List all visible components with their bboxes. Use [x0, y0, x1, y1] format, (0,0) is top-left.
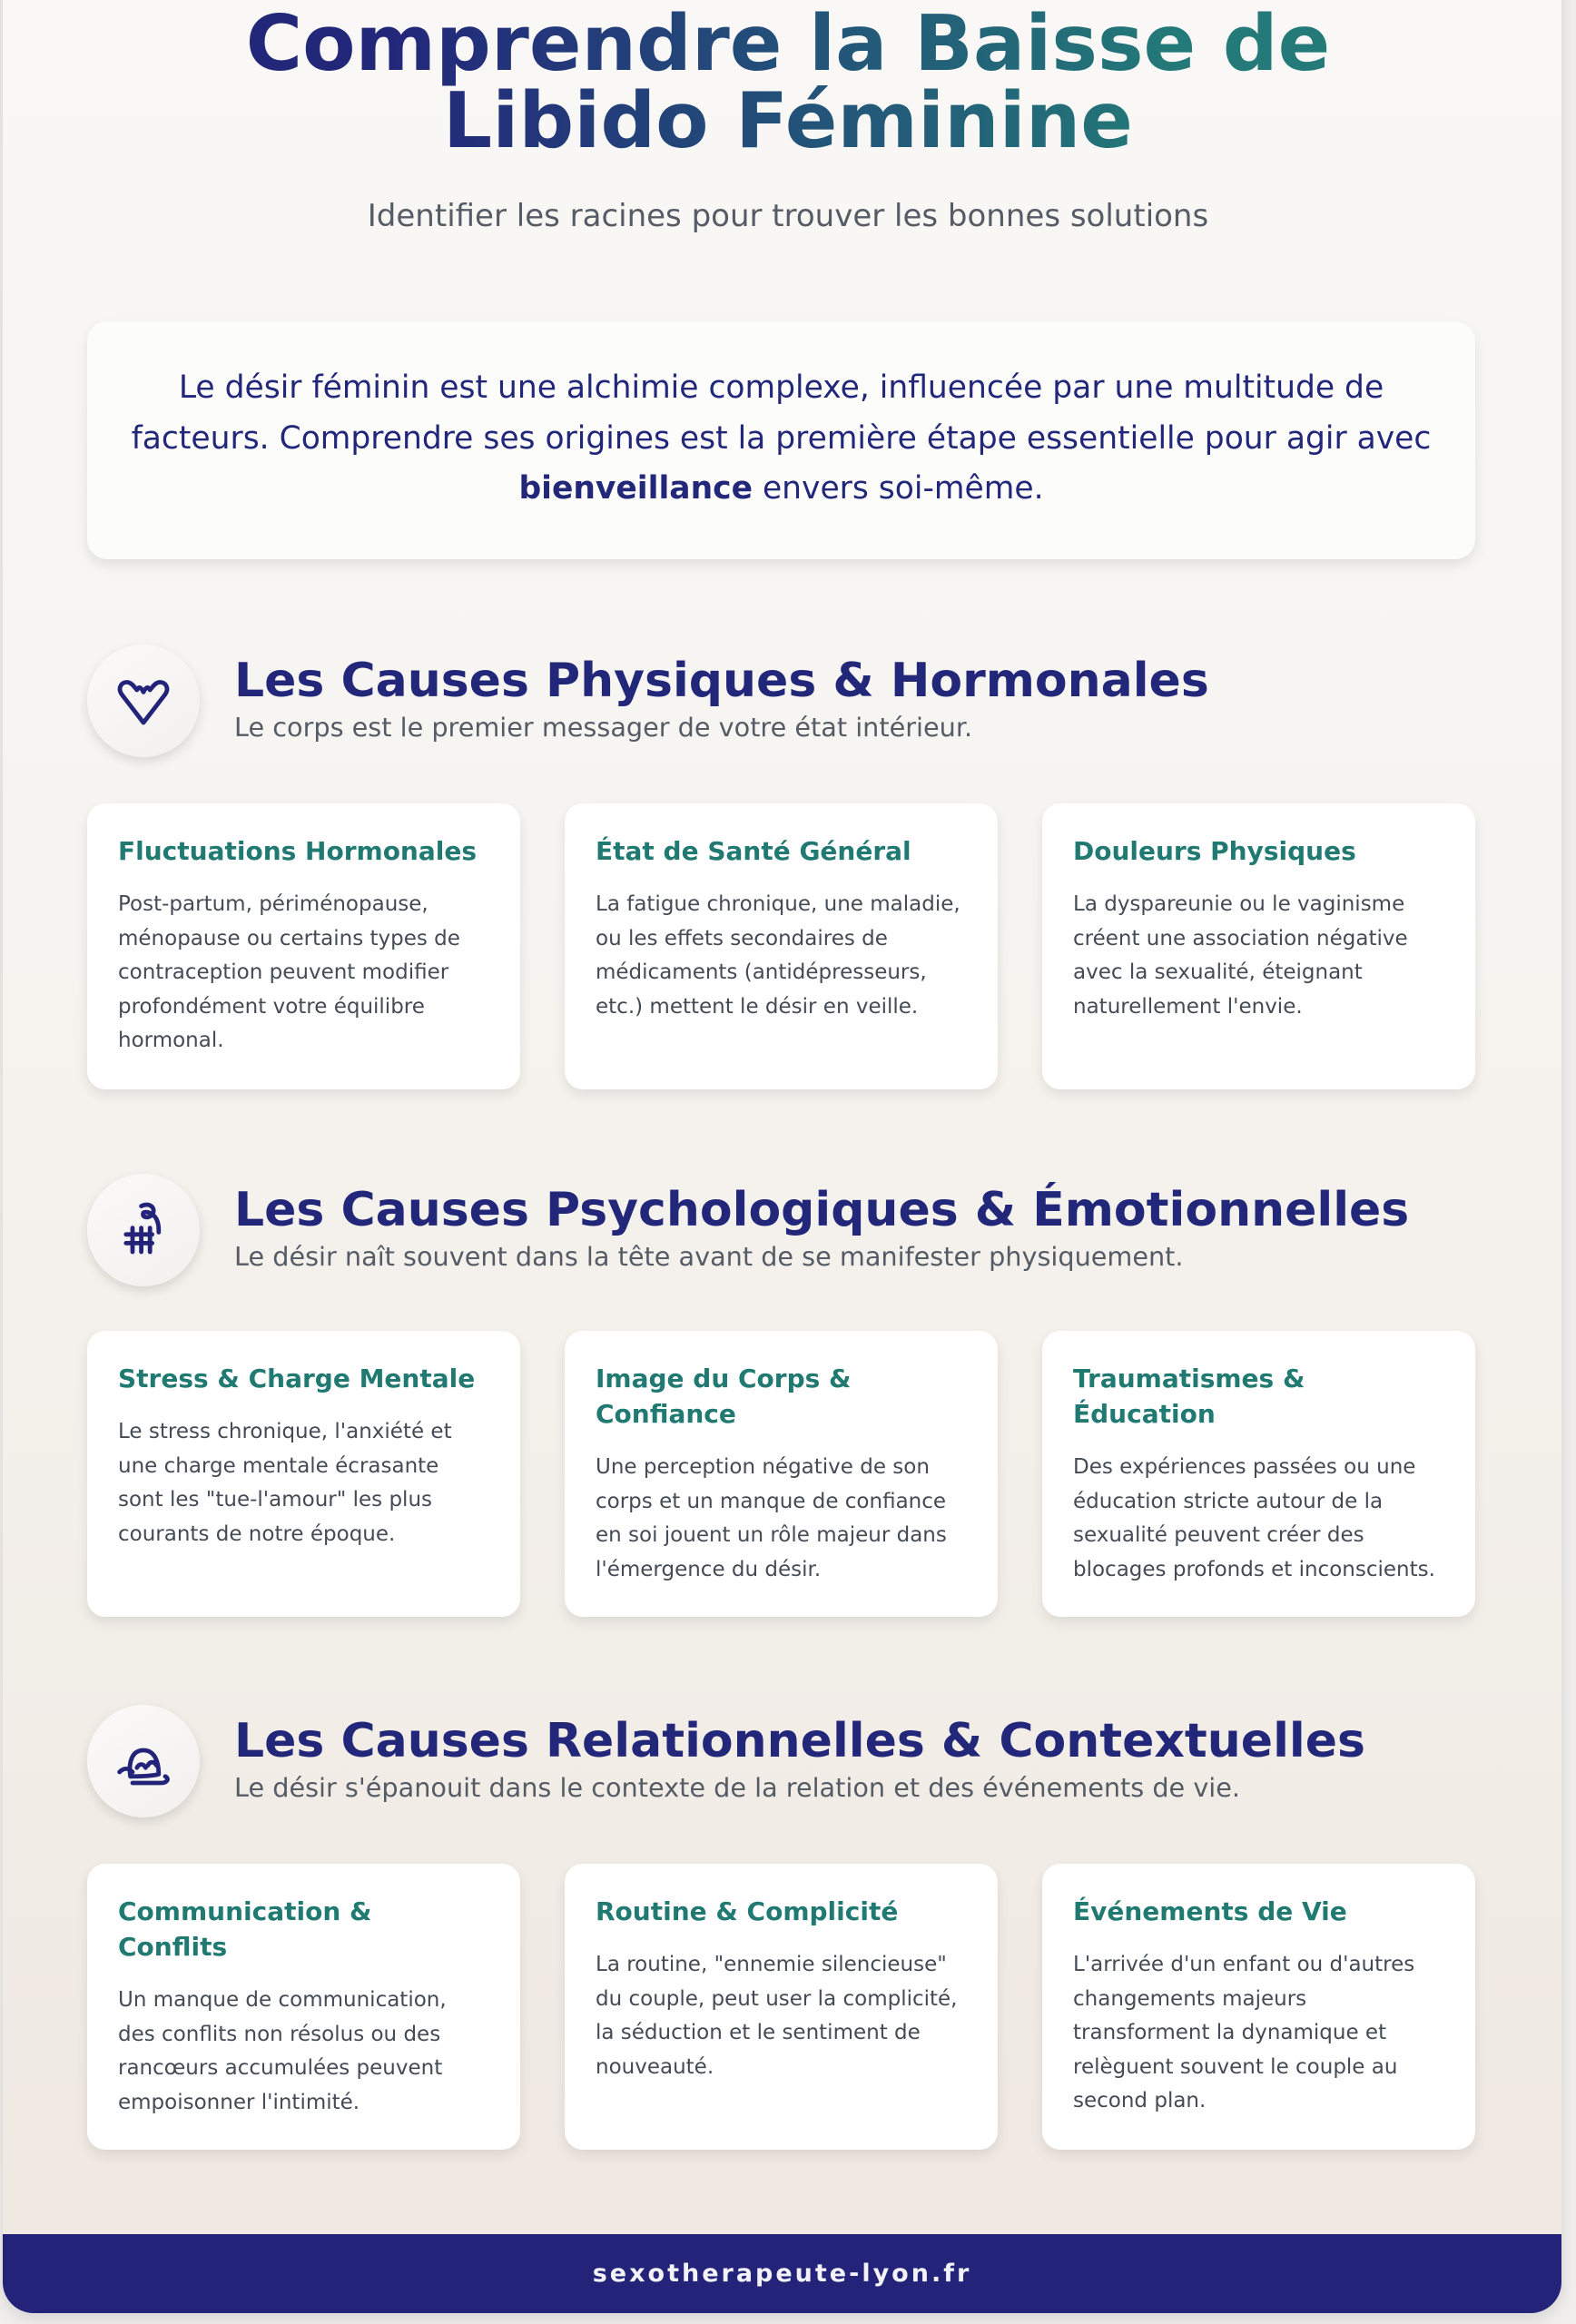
title [0, 5, 1576, 160]
card: routine: du couple, peut user la complicité, [596, 1986, 957, 2010]
card: communication: rancœurs accumulées peuvent [118, 2056, 442, 2080]
card: stress: une charge mentale écrasante [118, 1454, 438, 1478]
heading: physiques: Les Causes Physiques & Hormonales [234, 654, 1209, 708]
subheading: physiques: Le corps est le premier messager de votre état intérieur. [234, 712, 972, 743]
card: événements: L'arrivée d'un enfant ou d'autres [1073, 1953, 1414, 1976]
card: fluctuations: Post-partum, périménopause, [118, 892, 428, 916]
card: image du corps [565, 1331, 998, 1617]
card: image du corps: Une perception négative de son [596, 1455, 930, 1479]
card: traumatismes [1042, 1331, 1475, 1617]
card: santé [565, 803, 998, 1089]
intro callout: facteurs. Comprendre ses origines est la première étape essentielle pour agir avec [132, 419, 1431, 456]
card: traumatismes: Des expériences passées ou une [1073, 1455, 1415, 1479]
card: événements: changements majeurs [1073, 1986, 1306, 2010]
icon: mind [87, 1174, 200, 1286]
card: traumatismes: Éducation [1073, 1399, 1216, 1429]
card: stress: courants de notre époque. [118, 1521, 395, 1545]
card: image du corps: en soi jouent un rôle majeur dans [596, 1523, 947, 1547]
card: stress: Le stress chronique, l'anxiété et [118, 1420, 452, 1443]
card: image du corps: Confiance [596, 1399, 736, 1429]
card: stress: Stress & Charge Mentale [118, 1364, 475, 1393]
icon: couple [87, 1705, 200, 1817]
card: événements: relèguent souvent le couple au [1073, 2055, 1397, 2079]
card: événements: Événements de Vie [1073, 1896, 1347, 1926]
card: fluctuations: hormonal. [118, 1029, 224, 1052]
card: traumatismes: sexualité peuvent créer des [1073, 1523, 1364, 1547]
card: santé: ou les effets secondaires de [596, 926, 888, 950]
card: santé: médicaments (antidépresseurs, [596, 960, 927, 984]
subheading: psychologiques: Le désir naît souvent dans la tête avant de se manifester physiquement. [234, 1241, 1184, 1272]
card: stress: sont les "tue-l'amour" les plus [118, 1488, 432, 1512]
intro callout [87, 321, 1475, 559]
title: Comprendre la Baisse de [246, 0, 1330, 89]
card: douleurs: La dyspareunie ou le vaginisme [1073, 892, 1404, 916]
card: communication: des conflits non résolus ou des [118, 2023, 440, 2046]
card: routine: La routine, "ennemie silencieuse" [596, 1953, 947, 1976]
card: santé: État de Santé Général [596, 836, 911, 866]
card: douleurs: créent une association négative [1073, 926, 1408, 950]
card: routine: Routine & Complicité [596, 1896, 898, 1926]
card: communication: Communication & [118, 1896, 371, 1926]
card: douleurs [1042, 803, 1475, 1089]
card: traumatismes: blocages profonds et inconscients. [1073, 1558, 1435, 1581]
card: fluctuations: Fluctuations Hormonales [118, 836, 477, 866]
card: communication [87, 1864, 520, 2150]
intro callout: bienveillance envers soi-même. [518, 470, 1044, 507]
card: image du corps: corps et un manque de confiance [596, 1489, 946, 1512]
card: communication: empoisonner l'intimité. [118, 2090, 360, 2113]
card: fluctuations: contraception peuvent modifier [118, 960, 448, 984]
footer [3, 2234, 1561, 2313]
card: image du corps: Image du Corps & [596, 1364, 851, 1393]
card: événements [1042, 1864, 1475, 2150]
heading: relationnelles: Les Causes Relationnelles & Contextuelles [234, 1714, 1365, 1768]
footer: sexotherapeute-lyon.fr [593, 2260, 971, 2288]
card: routine [565, 1864, 998, 2150]
card: communication: Conflits [118, 1932, 227, 1962]
card: douleurs: naturellement l'envie. [1073, 995, 1303, 1019]
subheading: relationnelles: Le désir s'épanouit dans le contexte de la relation et des événements de vie. [234, 1772, 1240, 1803]
subtitle: Identifier les racines pour trouver les bonnes solutions [368, 198, 1208, 234]
card: événements: transforment la dynamique et [1073, 2021, 1386, 2044]
card: image du corps: l'émergence du désir. [596, 1558, 821, 1581]
card: traumatismes: éducation stricte autour de la [1073, 1489, 1383, 1512]
intro callout: Le désir féminin est une alchimie complexe, influencée par une multitude de [179, 369, 1384, 406]
card: douleurs: Douleurs Physiques [1073, 836, 1356, 866]
title: Libido Féminine [443, 76, 1133, 166]
card: communication: Un manque de communication, [118, 1988, 447, 2012]
card: événements: second plan. [1073, 2089, 1206, 2112]
card: douleurs: avec la sexualité, éteignant [1073, 960, 1363, 984]
heading: psychologiques: Les Causes Psychologiques & Émotionnelles [234, 1183, 1409, 1237]
card: traumatismes: Traumatismes & [1073, 1364, 1305, 1393]
card: fluctuations [87, 803, 520, 1089]
card: fluctuations: profondément votre équilibre [118, 995, 425, 1019]
card: routine: la séduction et le sentiment de [596, 2021, 921, 2044]
card: santé: etc.) mettent le désir en veille. [596, 995, 918, 1019]
icon: heart [87, 645, 200, 757]
card: stress [87, 1331, 520, 1617]
card: routine: nouveauté. [596, 2055, 714, 2079]
card: santé: La fatigue chronique, une maladie, [596, 892, 960, 916]
card: fluctuations: ménopause ou certains types de [118, 926, 460, 950]
